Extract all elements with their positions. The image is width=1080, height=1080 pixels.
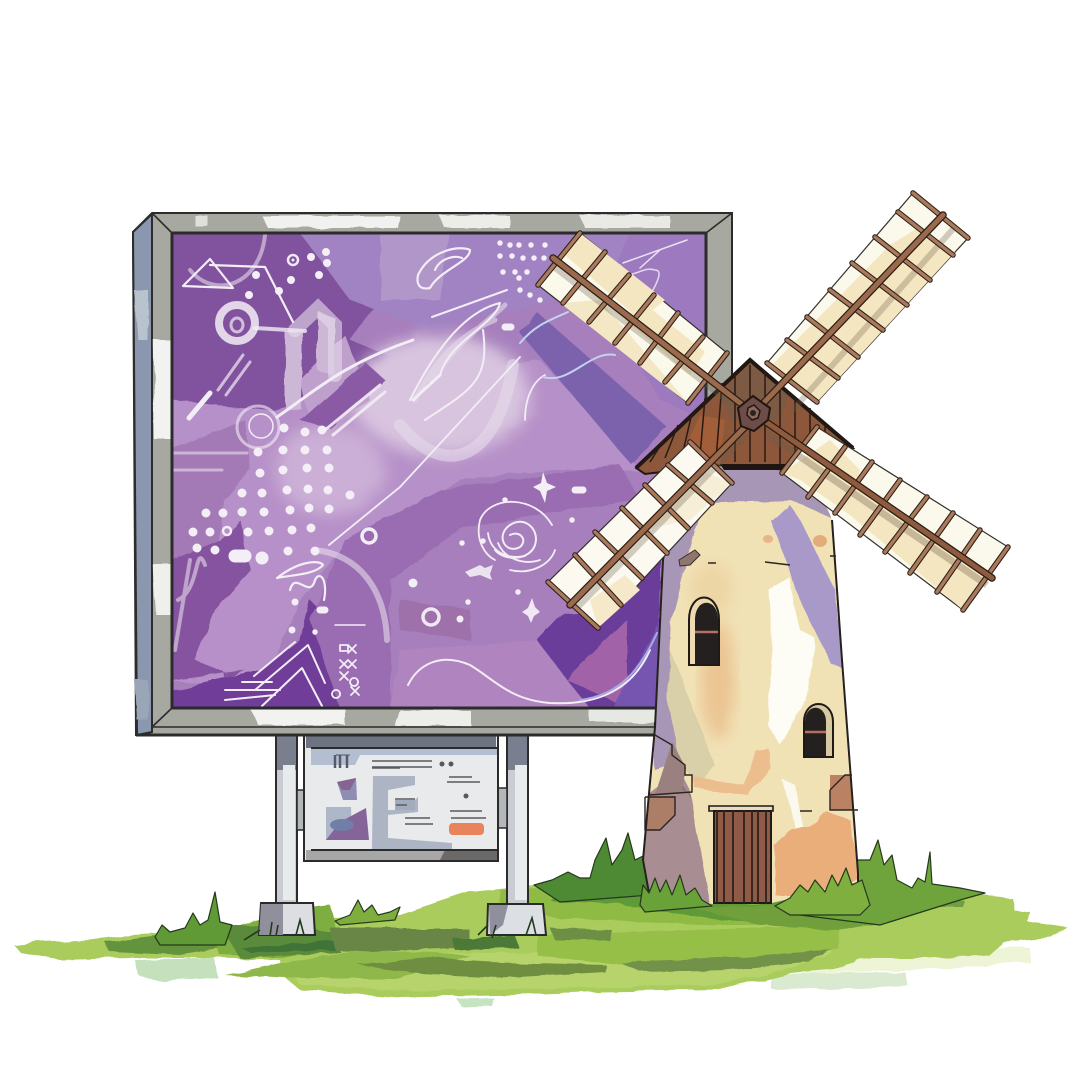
window: left <box>689 598 719 665</box>
concrete footings <box>244 903 546 940</box>
billboard <box>133 213 732 940</box>
tower washes <box>640 465 860 905</box>
door <box>709 806 773 903</box>
window: right <box>804 704 833 757</box>
sail: bottom left <box>548 427 747 628</box>
grass ground <box>14 833 1068 1007</box>
sail hub <box>738 396 770 431</box>
poster faint thick motifs <box>172 235 513 650</box>
poster white line art <box>183 240 687 706</box>
information panel <box>304 733 498 861</box>
poster washes <box>172 233 706 708</box>
billboard frame <box>133 213 732 735</box>
grass tufts behind <box>155 833 985 945</box>
purple poster <box>172 233 706 708</box>
tower cracks <box>645 556 858 830</box>
grass in front of tower <box>640 868 870 915</box>
sail: top right <box>755 193 968 412</box>
illustration: billboard and windmill on grass <box>14 190 1068 1008</box>
windmill roof <box>636 360 853 474</box>
poster dots and stars <box>193 243 583 632</box>
billboard legs <box>276 733 528 905</box>
sail: bottom right <box>753 413 1008 610</box>
windmill tower <box>640 465 870 915</box>
sail: top left <box>538 233 753 413</box>
